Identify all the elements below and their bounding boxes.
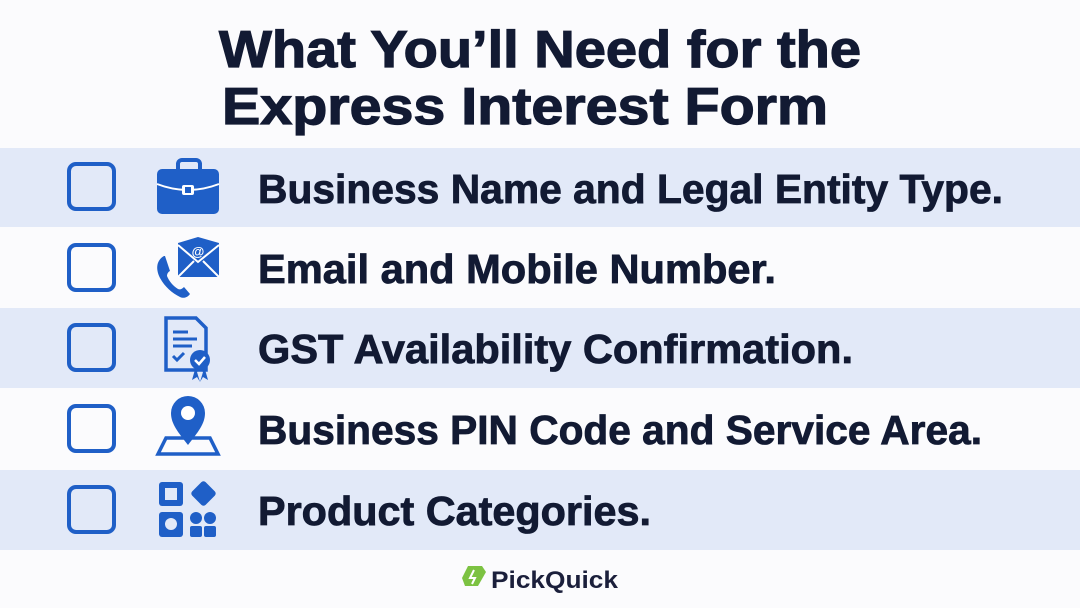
item texts: Email and Mobile Number. <box>258 246 776 292</box>
icon: GST document <box>166 318 210 382</box>
icon: product categories <box>159 480 217 537</box>
item texts: Business Name and Legal Entity Type. <box>258 166 1003 212</box>
icon: phone and email <box>157 237 219 298</box>
icon: location pin <box>158 396 218 454</box>
title: Express Interest Form <box>222 78 828 136</box>
title <box>219 21 861 136</box>
icon: phone and email: @ <box>192 244 204 259</box>
title: What You’ll Need for the <box>219 21 861 79</box>
row bands <box>0 148 1080 550</box>
item texts <box>258 166 1003 534</box>
logo: PickQuick <box>491 567 619 594</box>
icon: briefcase <box>157 160 219 214</box>
item texts: Business PIN Code and Service Area. <box>258 407 982 453</box>
item texts: Product Categories. <box>258 488 651 534</box>
checkboxes <box>69 164 114 532</box>
item texts: GST Availability Confirmation. <box>258 326 853 372</box>
